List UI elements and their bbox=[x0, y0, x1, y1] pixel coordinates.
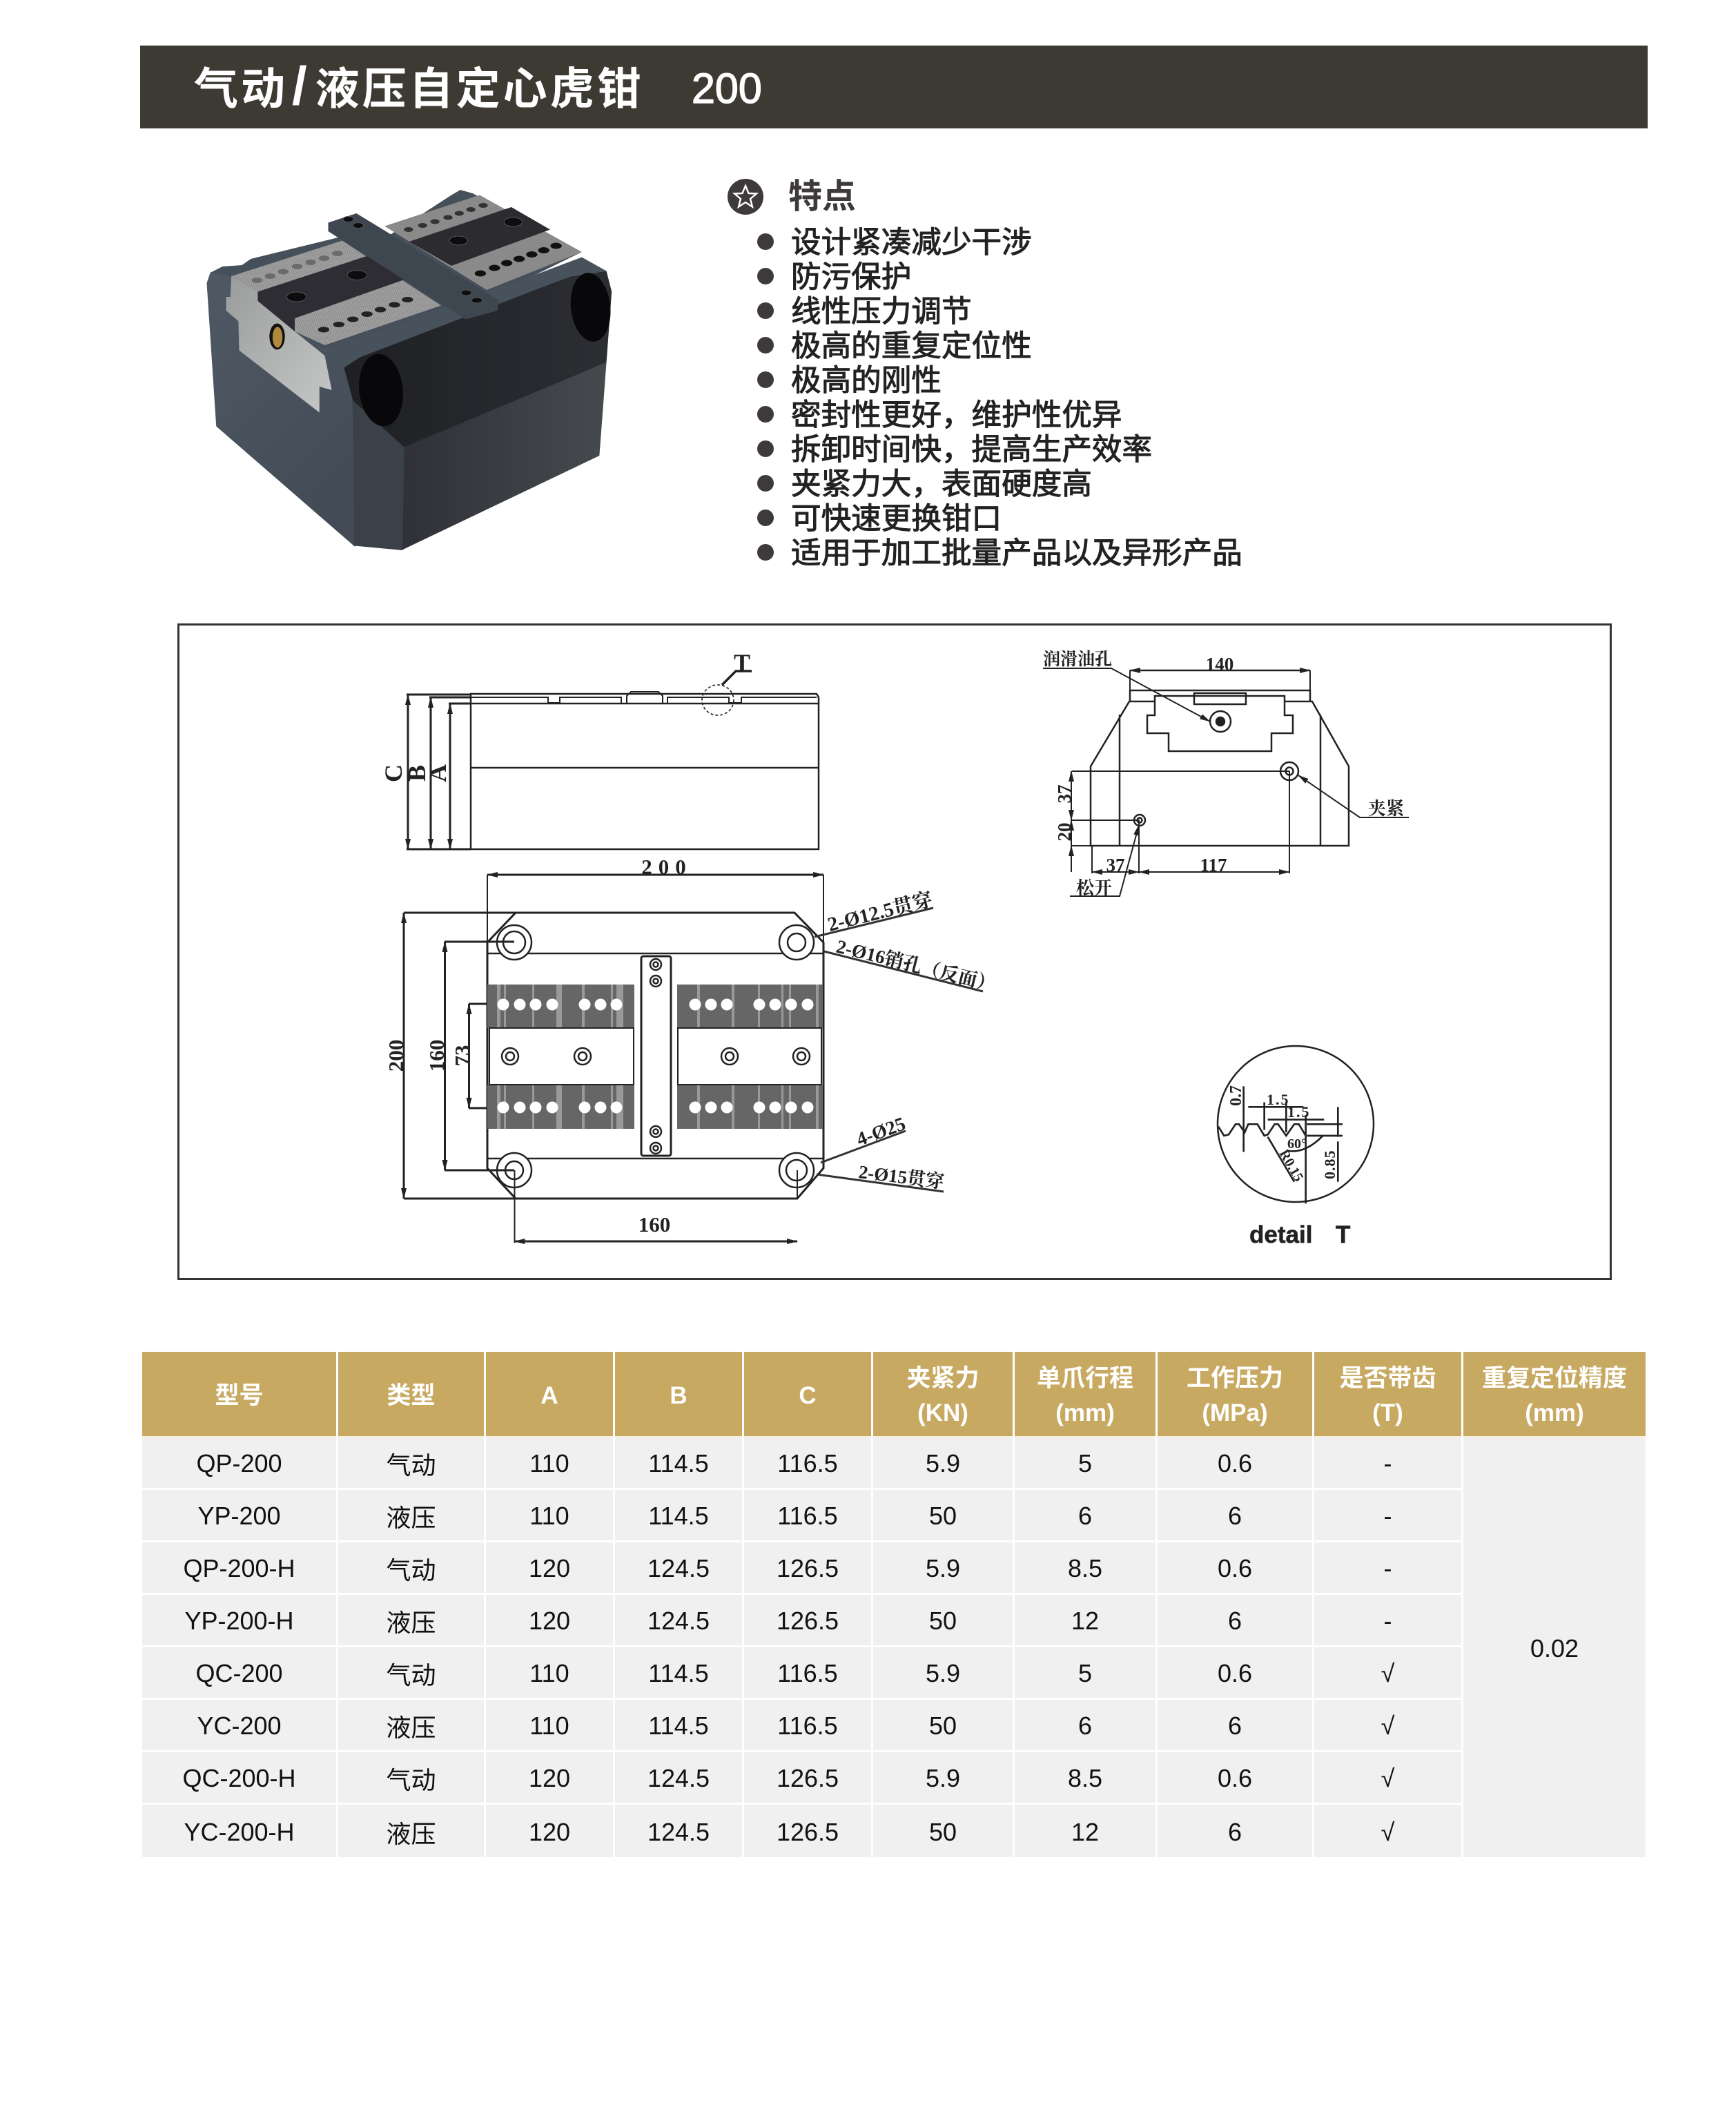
table header: 类型 bbox=[387, 1382, 435, 1409]
row QP-200: 116.5 bbox=[777, 1449, 838, 1477]
row QP-200: 5 bbox=[1078, 1449, 1092, 1477]
row QC-200: 5 bbox=[1078, 1659, 1092, 1687]
width dimension 200 bbox=[487, 875, 823, 942]
dim label 140: 140 bbox=[1206, 654, 1233, 675]
row QC-200: √ bbox=[1381, 1659, 1394, 1687]
row YP-200-H: - bbox=[1383, 1607, 1392, 1635]
row QC-200: QC-200 bbox=[195, 1659, 283, 1687]
brass oil nipple bbox=[269, 323, 285, 349]
row YC-200-H: 6 bbox=[1228, 1817, 1242, 1846]
row QC-200-H: 120 bbox=[529, 1764, 570, 1792]
table header: (KN) bbox=[917, 1399, 968, 1426]
panel: technical drawing frame bbox=[177, 623, 1612, 1280]
row QC-200-H: QC-200-H bbox=[182, 1764, 296, 1792]
row QC-200-H: 0.6 bbox=[1218, 1764, 1252, 1792]
features list: 极高的刚性 bbox=[791, 365, 942, 398]
row YC-200: 116.5 bbox=[777, 1712, 838, 1740]
slide lines bbox=[487, 953, 823, 1159]
dim label 160: 160 bbox=[425, 1040, 449, 1072]
technical drawings and product image bbox=[207, 190, 1409, 1248]
side view labels bbox=[380, 649, 750, 782]
title banner bbox=[140, 46, 1648, 128]
label 60 degrees: 60° bbox=[1287, 1136, 1307, 1152]
jaw holes bbox=[252, 203, 562, 333]
features heading bbox=[728, 178, 856, 215]
row YC-200: √ bbox=[1381, 1712, 1394, 1740]
table header: 型号 bbox=[215, 1382, 264, 1409]
row QP-200-H: 气动 bbox=[386, 1556, 436, 1584]
product image: vise bbox=[206, 190, 614, 550]
note: oil hole: 润滑油孔 bbox=[1043, 650, 1112, 669]
jaw holes bbox=[497, 998, 813, 1113]
upper front black band bbox=[344, 271, 612, 447]
row YC-200-H bbox=[142, 1805, 1461, 1857]
detail caption letter: T bbox=[1336, 1221, 1350, 1248]
label R0.15: R0.15 bbox=[1276, 1147, 1306, 1184]
row YP-200: 110 bbox=[529, 1502, 569, 1530]
middle jaw plates bbox=[489, 1028, 821, 1085]
plan outline bbox=[487, 913, 823, 1199]
row YC-200: 114.5 bbox=[648, 1712, 709, 1740]
row QP-200 bbox=[142, 1437, 1646, 1857]
cross bar bbox=[329, 213, 499, 319]
annotation leaders bbox=[815, 908, 983, 1192]
top profile bbox=[471, 692, 817, 704]
features list bbox=[757, 226, 1242, 570]
detail circle dashed bbox=[702, 685, 734, 715]
note: counterbore 25: 4-Ø25 bbox=[854, 1113, 908, 1151]
table header: 夹紧力 bbox=[906, 1365, 979, 1392]
note: release: 松开 bbox=[1076, 878, 1112, 898]
bottom dimension 160 bbox=[515, 1170, 797, 1243]
features list: 拆卸时间快，提高生产效率 bbox=[791, 434, 1152, 467]
row YP-200-H: YP-200-H bbox=[184, 1607, 294, 1635]
row YP-200: 液压 bbox=[386, 1504, 436, 1532]
row YP-200: YP-200 bbox=[197, 1502, 281, 1530]
row YC-200-H: 50 bbox=[929, 1817, 957, 1846]
row QP-200: 0.6 bbox=[1218, 1449, 1252, 1477]
right dark jaw plate bbox=[409, 207, 550, 266]
row QP-200-H: 120 bbox=[529, 1554, 570, 1582]
table header: (T) bbox=[1372, 1399, 1403, 1426]
row YP-200-H: 126.5 bbox=[777, 1607, 839, 1635]
drawing: end view bbox=[1043, 650, 1409, 898]
row YC-200-H: √ bbox=[1381, 1817, 1394, 1846]
features list: 密封性更好，维护性优异 bbox=[791, 399, 1122, 432]
heading text: 特点 bbox=[788, 178, 856, 215]
row YC-200-H: 124.5 bbox=[647, 1817, 710, 1846]
detail caption word: detail bbox=[1249, 1221, 1312, 1248]
table header: A bbox=[540, 1382, 558, 1409]
note: pin hole: 2-Ø16销孔（反面） bbox=[835, 936, 998, 996]
row QC-200-H: 5.9 bbox=[926, 1764, 960, 1792]
oil hole bbox=[1210, 711, 1231, 732]
table header: 是否带齿 bbox=[1339, 1365, 1436, 1392]
row YP-200-H: 6 bbox=[1228, 1607, 1242, 1635]
label T: T bbox=[734, 649, 750, 677]
end view dimensions bbox=[1071, 670, 1310, 873]
label B: B bbox=[403, 765, 431, 782]
row QC-200: 116.5 bbox=[777, 1659, 838, 1687]
row YC-200: 液压 bbox=[386, 1714, 436, 1742]
row QP-200-H: 124.5 bbox=[647, 1554, 710, 1582]
row QC-200-H: 气动 bbox=[386, 1766, 436, 1794]
body outline bbox=[471, 694, 819, 849]
drawing: top plan view bbox=[384, 855, 998, 1243]
table header: (mm) bbox=[1055, 1399, 1115, 1426]
row YC-200 bbox=[142, 1700, 1461, 1750]
dim label 117: 117 bbox=[1200, 855, 1227, 875]
row YC-200-H: 液压 bbox=[386, 1820, 436, 1848]
row QC-200 bbox=[142, 1647, 1461, 1698]
clamp port bbox=[1280, 762, 1298, 780]
features list: 防污保护 bbox=[791, 261, 911, 294]
row QP-200: 114.5 bbox=[648, 1449, 709, 1477]
row QP-200-H: QP-200-H bbox=[183, 1554, 295, 1582]
row YC-200-H: 126.5 bbox=[777, 1817, 839, 1846]
row QC-200-H: 8.5 bbox=[1068, 1764, 1102, 1792]
row YP-200: 116.5 bbox=[777, 1502, 838, 1530]
features list: 极高的重复定位性 bbox=[791, 330, 1032, 363]
lower front face bbox=[400, 362, 607, 550]
row QP-200-H bbox=[142, 1542, 1461, 1593]
row QP-200: - bbox=[1383, 1449, 1392, 1477]
corner mounting holes bbox=[497, 925, 814, 1187]
table header: C bbox=[799, 1382, 817, 1409]
row YP-200-H: 50 bbox=[929, 1607, 957, 1635]
row YP-200: 50 bbox=[929, 1502, 957, 1530]
drawing: detail T bbox=[1218, 1046, 1374, 1248]
row QC-200: 0.6 bbox=[1218, 1659, 1252, 1687]
thread profile and dimensions bbox=[1218, 1086, 1343, 1203]
left serrated jaw top bbox=[231, 240, 441, 345]
row QP-200-H: 5.9 bbox=[926, 1554, 960, 1582]
row YC-200: YC-200 bbox=[197, 1712, 282, 1740]
row YC-200: 110 bbox=[529, 1712, 569, 1740]
row QC-200: 气动 bbox=[386, 1661, 436, 1689]
top ledge bbox=[324, 257, 607, 367]
left dark jaw plate bbox=[257, 254, 409, 331]
center bar bbox=[641, 956, 671, 1156]
left dimensions 200 160 73 bbox=[404, 913, 516, 1199]
row QP-200: 5.9 bbox=[926, 1449, 960, 1477]
row QP-200-H: 126.5 bbox=[777, 1554, 839, 1582]
label 0.7: 0.7 bbox=[1227, 1085, 1245, 1106]
row QP-200: QP-200 bbox=[196, 1449, 282, 1477]
icon: star badge bbox=[728, 179, 763, 215]
row YC-200: 6 bbox=[1228, 1712, 1242, 1740]
row QC-200-H: √ bbox=[1381, 1764, 1394, 1792]
row YP-200-H: 液压 bbox=[386, 1609, 436, 1637]
dimension C bbox=[407, 695, 409, 849]
row QP-200: 110 bbox=[529, 1449, 569, 1477]
dim label 37 horizontal: 37 bbox=[1106, 855, 1125, 875]
model number: 200 bbox=[692, 65, 762, 112]
dimension extension lines bbox=[407, 695, 471, 849]
leader to T bbox=[722, 671, 752, 685]
label 0.85: 0.85 bbox=[1321, 1150, 1338, 1179]
table header: 单爪行程 bbox=[1037, 1365, 1133, 1392]
row YP-200-H: 12 bbox=[1071, 1607, 1099, 1635]
dim label 73: 73 bbox=[450, 1045, 474, 1066]
serrated bands bbox=[487, 985, 823, 1129]
features list: 夹紧力大，表面硬度高 bbox=[791, 468, 1092, 501]
row YP-200: 6 bbox=[1228, 1502, 1242, 1530]
label C: C bbox=[380, 764, 407, 782]
row YC-200-H: 120 bbox=[529, 1817, 570, 1846]
features list: 设计紧凑减少干涉 bbox=[791, 226, 1032, 260]
bottom dim label: 160 bbox=[638, 1212, 670, 1237]
left side face bbox=[206, 273, 356, 547]
table header: (mm) bbox=[1525, 1399, 1584, 1426]
jaw and bar screws bbox=[286, 217, 523, 303]
row QC-200: 114.5 bbox=[648, 1659, 709, 1687]
leaders bbox=[1043, 668, 1409, 896]
table header bbox=[142, 1352, 1646, 1857]
width label: 200 bbox=[641, 855, 692, 879]
end recess right bbox=[567, 271, 614, 344]
row QC-200: 5.9 bbox=[926, 1659, 960, 1687]
body outline bbox=[1091, 690, 1349, 846]
specification table bbox=[142, 1352, 1646, 1857]
lower chamfer face bbox=[353, 400, 404, 550]
center strip gaps bbox=[634, 985, 677, 1129]
row YC-200-H: 12 bbox=[1071, 1817, 1099, 1846]
dim label 200: 200 bbox=[384, 1040, 408, 1072]
label A: A bbox=[424, 764, 451, 782]
table header: 重复定位精度 bbox=[1482, 1365, 1627, 1392]
title text: 气动/液压自定心虎钳 bbox=[194, 55, 644, 116]
band stripes bbox=[497, 985, 819, 1129]
row YP-200 bbox=[142, 1490, 1461, 1540]
features list: 线性压力调节 bbox=[791, 295, 972, 329]
features list: 适用于加工批量产品以及异形产品 bbox=[791, 537, 1242, 570]
row QP-200: 气动 bbox=[386, 1451, 436, 1480]
row YP-200: 114.5 bbox=[648, 1502, 709, 1530]
note: through hole 12.5: 2-Ø12.5贯穿 bbox=[826, 888, 935, 936]
row QC-200-H: 126.5 bbox=[777, 1764, 839, 1792]
dimension A bbox=[449, 704, 451, 849]
right serrated jaw top bbox=[384, 195, 582, 290]
features list: 可快速更换钳口 bbox=[791, 503, 1002, 536]
drawing: side view bbox=[407, 671, 819, 849]
row QP-200-H: 0.6 bbox=[1218, 1554, 1252, 1582]
release port bbox=[1134, 815, 1145, 826]
table header: 0.02 bbox=[1530, 1634, 1579, 1662]
note: through hole 15: 2-Ø15贯穿 bbox=[857, 1161, 946, 1192]
dim label 20 vertical: 20 bbox=[1054, 823, 1075, 841]
row YC-200: 50 bbox=[929, 1712, 957, 1740]
dim label 37 vertical: 37 bbox=[1054, 784, 1075, 804]
row YC-200-H: YC-200-H bbox=[184, 1817, 295, 1846]
label 1.5 upper: 1.5 bbox=[1267, 1091, 1289, 1108]
row QP-200-H: 8.5 bbox=[1068, 1554, 1102, 1582]
plate screws bbox=[502, 959, 810, 1154]
row YC-200: 6 bbox=[1078, 1712, 1092, 1740]
end recess left bbox=[355, 352, 407, 428]
row YP-200: - bbox=[1383, 1502, 1392, 1530]
row YP-200: 6 bbox=[1078, 1502, 1092, 1530]
silver jaw side bbox=[226, 276, 332, 413]
dimension B bbox=[429, 697, 432, 849]
row YP-200-H bbox=[142, 1595, 1461, 1645]
table header: B bbox=[670, 1382, 687, 1409]
table header: 工作压力 bbox=[1187, 1365, 1283, 1392]
row QP-200-H: - bbox=[1383, 1554, 1392, 1582]
label 1.5 lower: 1.5 bbox=[1287, 1103, 1310, 1121]
row YP-200-H: 120 bbox=[529, 1607, 570, 1635]
table header: (MPa) bbox=[1202, 1399, 1268, 1426]
row QC-200-H: 124.5 bbox=[647, 1764, 710, 1792]
row YP-200-H: 124.5 bbox=[647, 1607, 710, 1635]
row QC-200: 110 bbox=[529, 1659, 569, 1687]
detail circle bbox=[1218, 1046, 1374, 1202]
rear rim bbox=[211, 190, 582, 351]
row QC-200-H bbox=[142, 1752, 1461, 1803]
note: clamp: 夹紧 bbox=[1368, 799, 1404, 819]
